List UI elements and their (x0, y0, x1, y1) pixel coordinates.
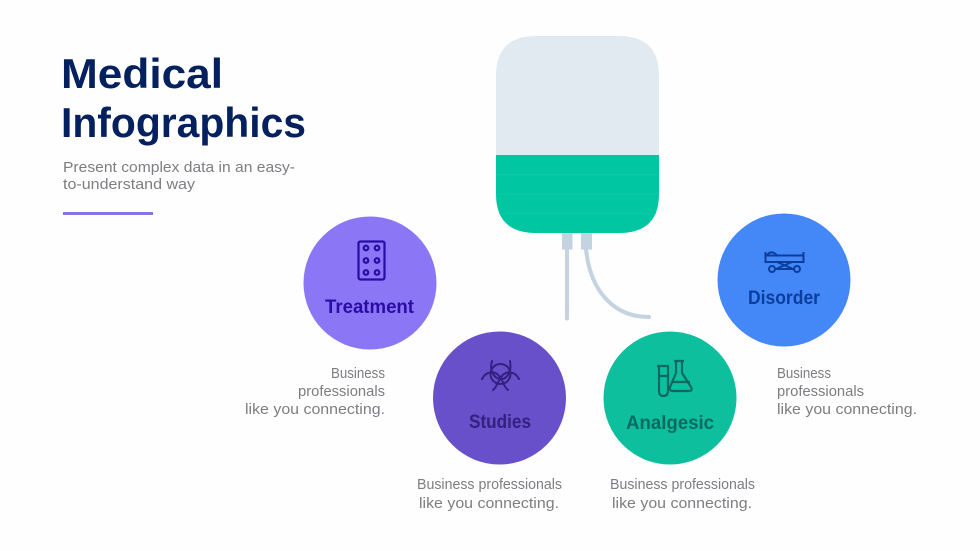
icon: biohazard (482, 361, 519, 390)
label: Disorder (748, 288, 821, 309)
icon: hospital stretcher (766, 252, 804, 272)
text: Disorder description: professionals (777, 383, 864, 400)
label: Treatment (325, 297, 415, 318)
circle: Analgesic (604, 332, 736, 464)
title: Infographics (61, 99, 306, 146)
text: Treatment description: like you connecting. (245, 401, 385, 418)
text: Treatment description: professionals (298, 383, 385, 400)
IV bag illustration (496, 36, 659, 318)
text: Disorder description: Business (777, 365, 831, 382)
text: Analgesic description: Business professionals (610, 476, 755, 493)
icon: test tube and flask (657, 361, 692, 396)
bag tubes (562, 233, 649, 318)
text: Analgesic description: like you connecting. (612, 495, 752, 512)
text: Studies description: like you connecting. (419, 495, 559, 512)
circle: Studies (433, 332, 566, 464)
title (61, 50, 306, 146)
circle: Treatment (304, 216, 436, 350)
text: Studies description (417, 476, 562, 512)
bag upper empty section (496, 36, 659, 155)
title: Medical (61, 50, 223, 97)
text: Disorder description: like you connecting. (777, 401, 917, 418)
circle: Disorder (718, 214, 850, 346)
subtitle (63, 159, 295, 193)
text: Studies description: Business professionals (417, 476, 562, 493)
text: Treatment description: Business (331, 365, 385, 382)
label: Analgesic (626, 413, 714, 434)
text: Treatment description (245, 365, 385, 418)
text: Analgesic description (610, 476, 755, 512)
text: Disorder description (777, 365, 917, 418)
icon: pill blister pack (358, 242, 384, 280)
title underline (63, 212, 153, 215)
subtitle: Present complex data in an easy- (63, 159, 295, 176)
label: Studies (469, 412, 531, 433)
bag liquid (496, 155, 659, 233)
subtitle: to-understand way (63, 176, 196, 193)
